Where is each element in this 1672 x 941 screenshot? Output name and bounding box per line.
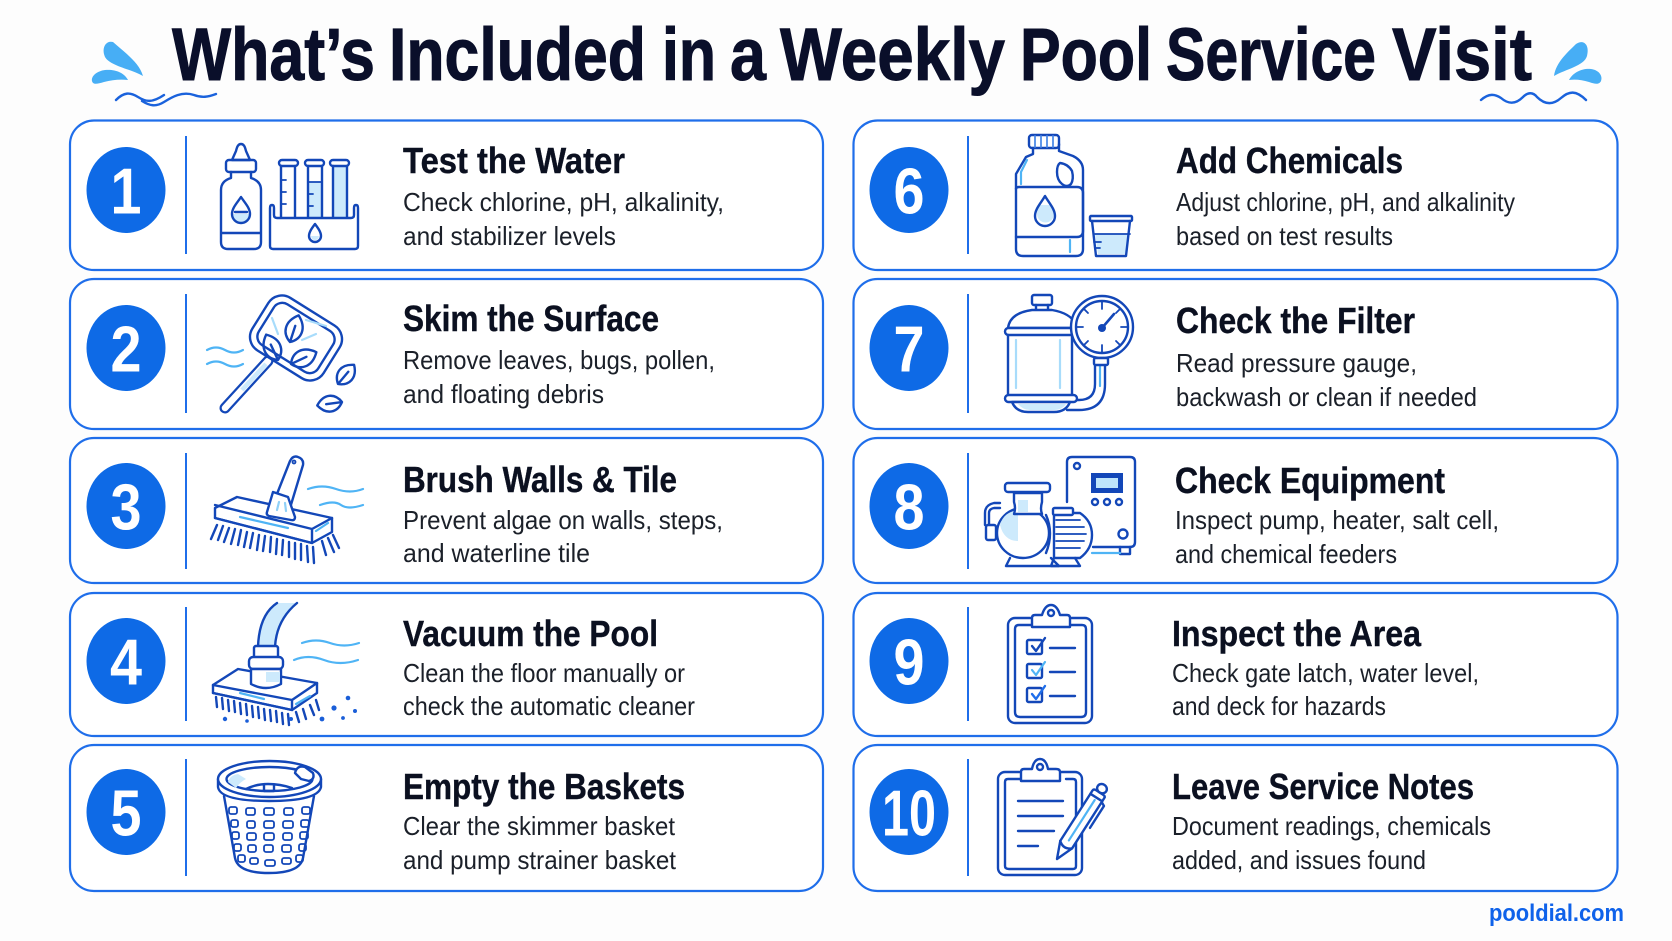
description <box>1176 187 1515 251</box>
icon: filter tank with pressure gauge <box>1005 295 1133 412</box>
title: What’s <box>172 13 375 96</box>
number badge 1 <box>86 147 166 233</box>
description: check the automatic cleaner <box>403 691 695 721</box>
number badge 4: 4 <box>110 626 142 698</box>
description: based on test results <box>1176 221 1393 251</box>
panel: step 9 inspect the area <box>854 593 1618 736</box>
number badge 6: 6 <box>894 154 924 228</box>
panel: step 7 check the filter <box>854 279 1618 429</box>
description: and waterline tile <box>403 538 590 568</box>
title: Weekly <box>780 13 1005 96</box>
number badge 2: 2 <box>110 312 142 386</box>
brand url: pooldial.com <box>1489 900 1624 927</box>
description: Clean the floor manually or <box>403 658 685 688</box>
heading: Check Equipment <box>1175 460 1445 501</box>
title: Pool <box>1020 13 1152 96</box>
description <box>1176 348 1477 412</box>
heading: Test the Water <box>403 140 625 181</box>
description: Clear the skimmer basket <box>403 811 676 841</box>
number badge 8: 8 <box>894 470 924 544</box>
heading: Check the Filter <box>1176 300 1415 341</box>
heading: Empty the Baskets <box>403 766 685 807</box>
number badge 10: 10 <box>882 776 936 850</box>
title: Visit <box>1392 13 1532 96</box>
icon: pump and control box <box>985 457 1135 566</box>
description: Read pressure gauge, <box>1176 348 1417 378</box>
icon: left water splash <box>92 42 216 105</box>
description: and stabilizer levels <box>403 221 616 251</box>
panel: step 1 test the water <box>70 120 823 270</box>
number badge 8 <box>870 463 948 549</box>
description: backwash or clean if needed <box>1176 382 1477 412</box>
description: added, and issues found <box>1172 845 1426 875</box>
number badge 3: 3 <box>110 470 142 544</box>
icon: right water splash <box>1481 42 1602 103</box>
heading: Leave Service Notes <box>1172 766 1474 807</box>
description <box>1175 505 1499 569</box>
title: a <box>730 13 767 96</box>
heading: Brush Walls & Tile <box>403 459 677 500</box>
description: Check gate latch, water level, <box>1172 658 1479 688</box>
panel: step 3 brush walls and tile <box>70 438 823 583</box>
number badge 1: 1 <box>110 154 142 228</box>
description: Prevent algae on walls, steps, <box>403 505 723 535</box>
number badge 9 <box>870 618 948 704</box>
number badge 9: 9 <box>894 626 924 698</box>
description: Inspect pump, heater, salt cell, <box>1175 505 1499 535</box>
number badge 2 <box>86 305 166 391</box>
description: and deck for hazards <box>1172 691 1386 721</box>
icon: chemical jug and cup <box>1016 135 1132 256</box>
description <box>403 505 723 568</box>
description <box>403 658 695 721</box>
number badge 10 <box>870 769 948 855</box>
description: Remove leaves, bugs, pollen, <box>403 345 715 375</box>
description <box>403 345 715 409</box>
description <box>1172 658 1479 721</box>
heading: Vacuum the Pool <box>403 613 658 654</box>
title: Service <box>1166 13 1376 96</box>
number badge 4 <box>86 618 166 704</box>
number badge 7: 7 <box>894 312 924 386</box>
description <box>403 187 724 251</box>
icon: pool vacuum head <box>213 603 359 725</box>
panel: step 10 leave service notes <box>854 745 1618 891</box>
number badge 6 <box>870 147 948 233</box>
description <box>1172 811 1491 875</box>
number badge 5: 5 <box>110 776 142 850</box>
description: and pump strainer basket <box>403 845 677 875</box>
panel: step 8 check equipment <box>854 438 1618 583</box>
title: in <box>662 13 716 96</box>
number badge 3 <box>86 463 166 549</box>
heading: Skim the Surface <box>403 298 659 339</box>
description: Document readings, chemicals <box>1172 811 1491 841</box>
icon: service notes clipboard and pen <box>998 759 1114 875</box>
icon: skimmer basket <box>218 761 321 873</box>
number badge 7 <box>870 305 948 391</box>
icon: wall brush <box>211 456 363 563</box>
icon: inspection checklist clipboard <box>1008 605 1092 723</box>
description: and chemical feeders <box>1175 539 1397 569</box>
description <box>403 811 677 875</box>
icon: test bottle and tubes <box>221 144 358 249</box>
description: and floating debris <box>403 379 604 409</box>
panel: step 6 add chemicals <box>854 120 1618 270</box>
heading: Add Chemicals <box>1176 140 1403 181</box>
icon: leaf skimmer net <box>207 289 360 413</box>
title: Included <box>389 13 646 96</box>
description: Adjust chlorine, pH, and alkalinity <box>1176 187 1515 217</box>
panel: step 5 empty the baskets <box>70 745 823 891</box>
heading: Inspect the Area <box>1172 613 1422 654</box>
title <box>172 13 1532 96</box>
panel: step 2 skim the surface <box>70 279 823 429</box>
number badge 5 <box>86 769 166 855</box>
panel: step 4 vacuum the pool <box>70 593 823 736</box>
description: Check chlorine, pH, alkalinity, <box>403 187 724 217</box>
